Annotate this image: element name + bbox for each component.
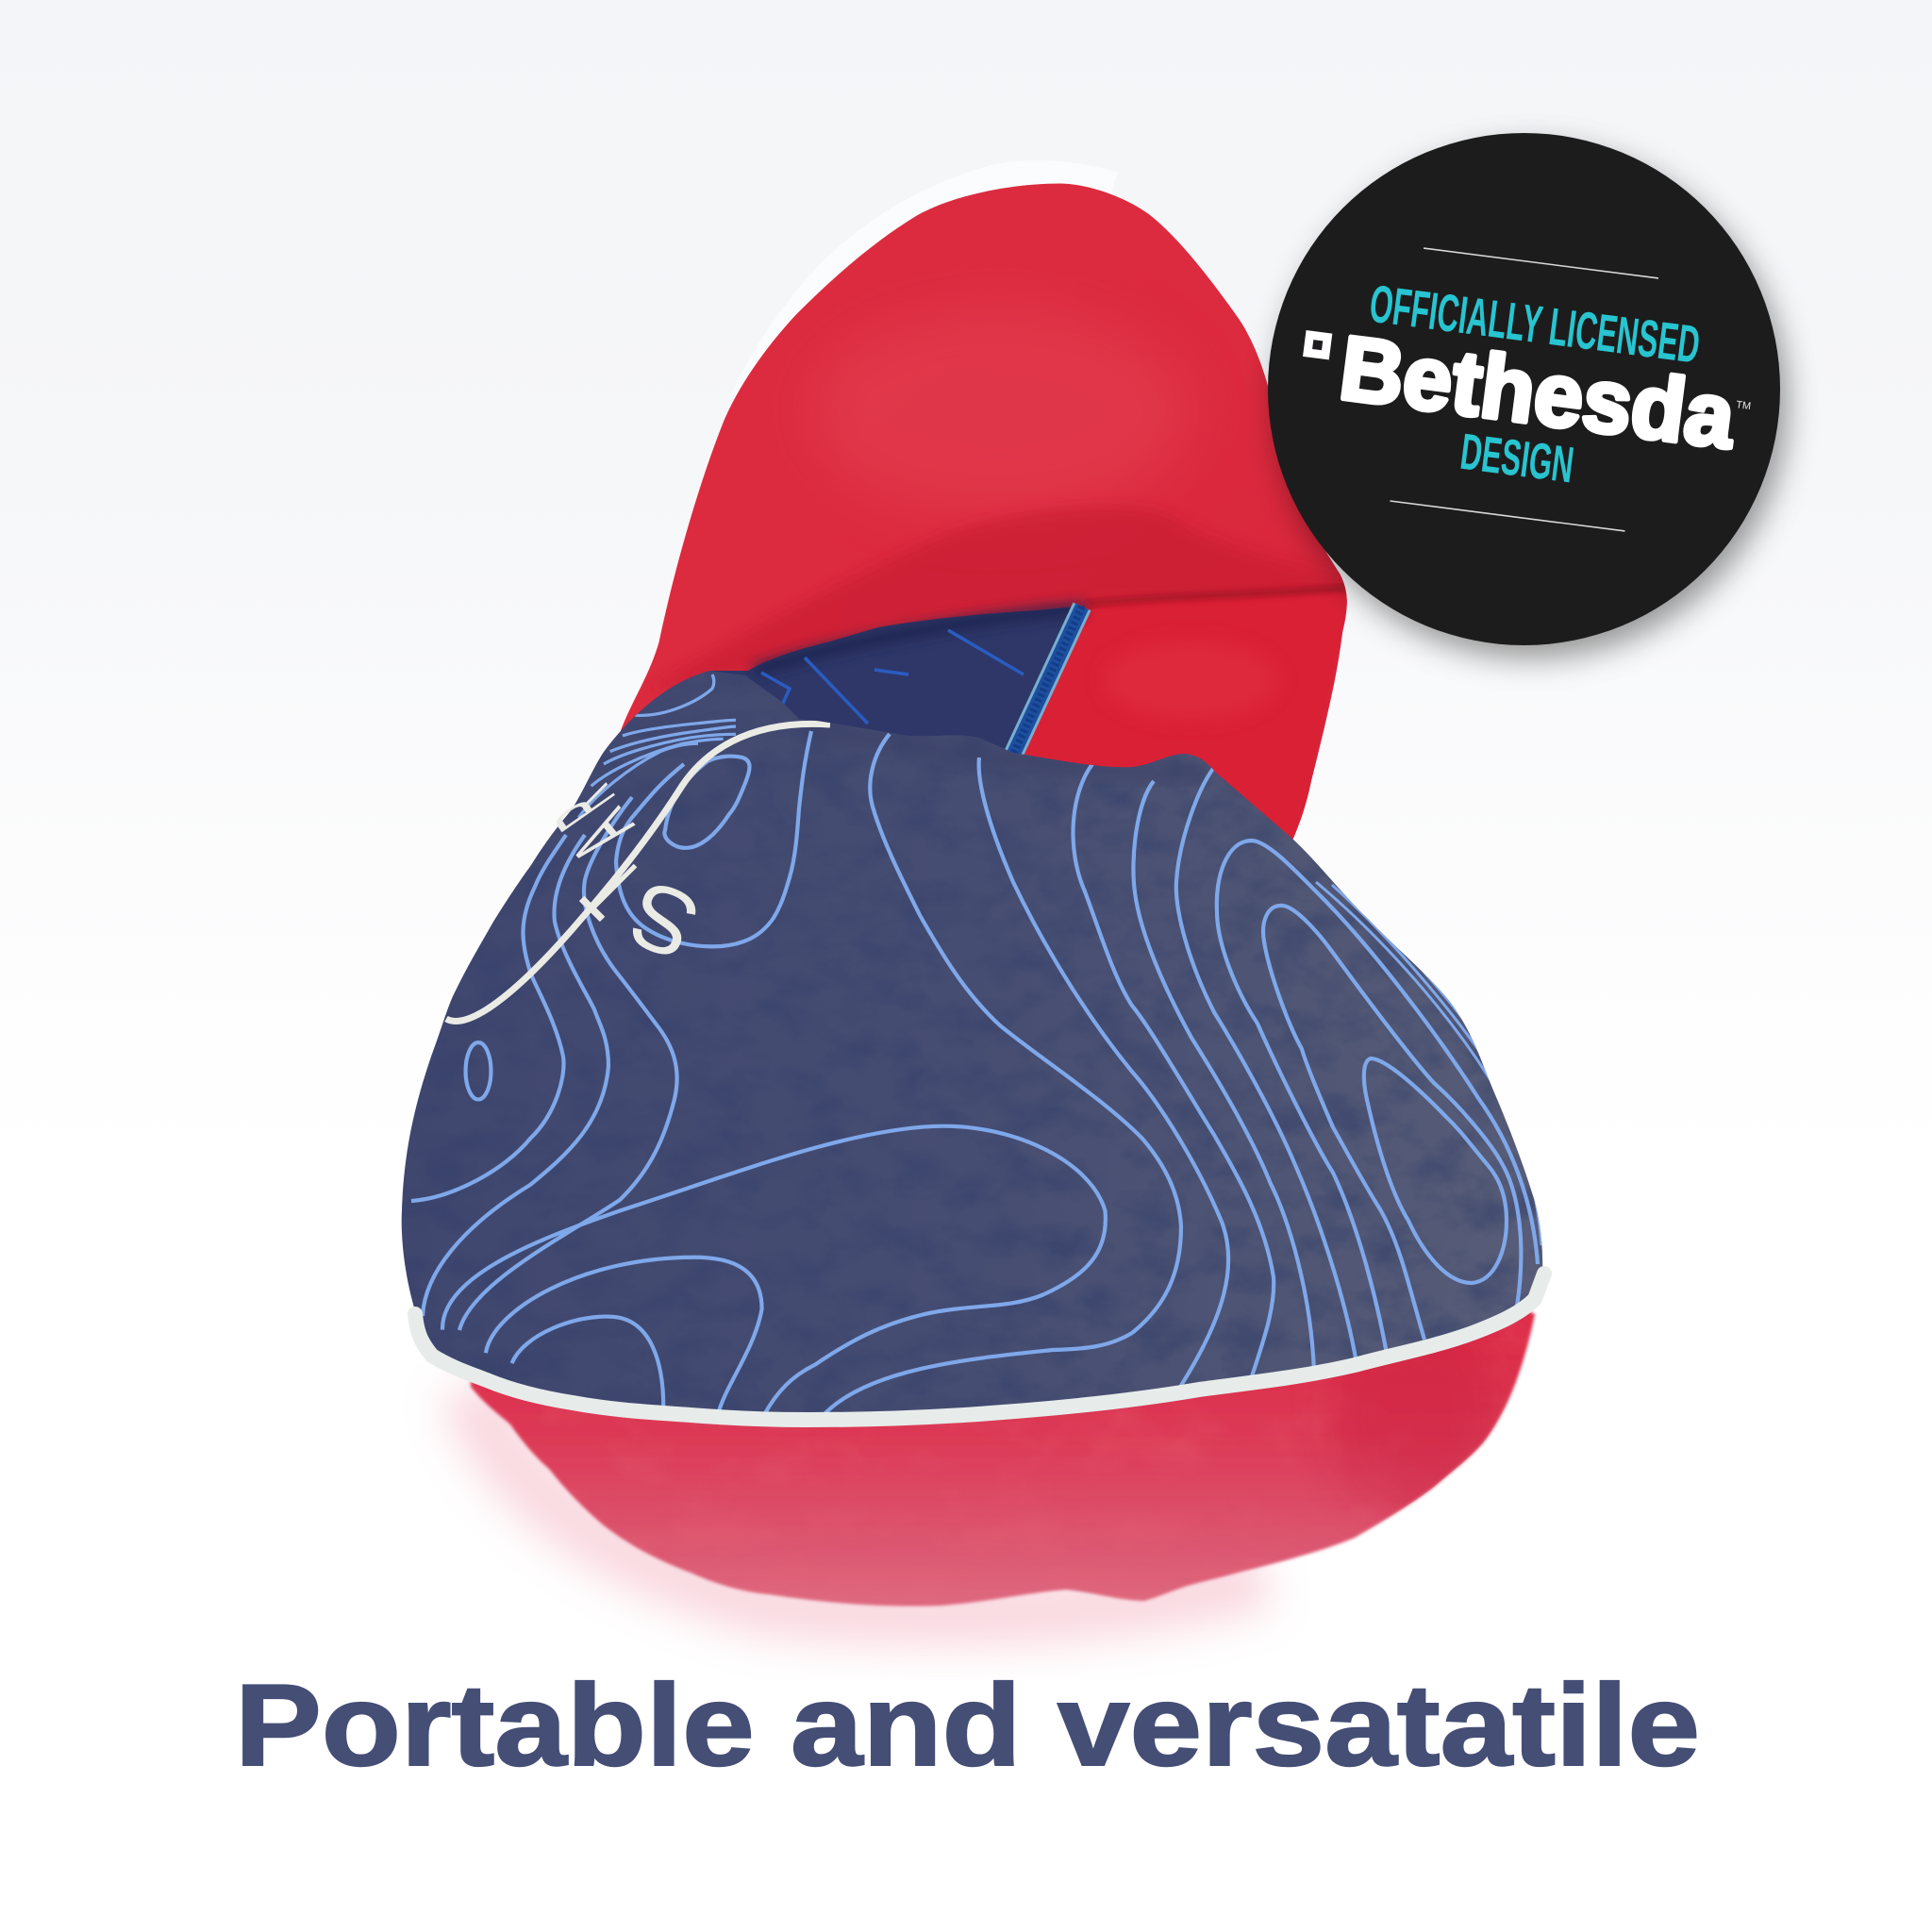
right inner loop [1263,906,1521,1340]
line L2 [824,734,1181,1415]
highlight on right panel [1124,658,1257,702]
red lobe base [621,183,1347,841]
title: Portable and versatatile [235,1661,1700,1790]
logo letters printed on pillow: R [536,770,633,845]
badge text: design: DESIGN [1457,424,1577,494]
upper red lobe of pillow [621,173,1350,843]
badge divider top [1424,248,1658,278]
badge divider bottom [1390,501,1624,531]
line L3 [979,758,1228,1394]
left line A3 [459,797,677,1330]
velour mottling on base [1118,1324,1515,1531]
dark shadow under flap [755,608,1085,672]
navy fabric body [402,671,1542,1420]
small loop [664,757,750,848]
logo letters printed on pillow [536,770,713,981]
badge: officially licensed Bethesda design [1268,133,1780,645]
line L5 [1133,781,1314,1373]
darker top shading [1006,749,1199,778]
inner navy lining of mouth [709,606,1085,759]
shaded flap under lobe [647,507,1345,690]
line L6 [1176,766,1357,1363]
white ring of logo [446,724,830,1021]
navy body with contour map print [396,660,1557,1424]
soft pink fabric halo around base [471,1387,1264,1613]
lower right red panel [1079,591,1347,840]
contour print clipped to body [396,660,1557,1424]
bottom lines and small oval [442,1042,1106,1415]
left line A1 [411,835,566,1201]
white piping behind lobe [741,173,1114,404]
logo letters printed on pillow: A [555,791,652,879]
logo letters printed on pillow: S [615,859,713,981]
right closed loop [1364,1058,1507,1283]
logo letters printed on pillow: T [564,840,661,937]
crease shadow [1085,588,1347,604]
interior contour lines [761,630,1024,724]
line L1 [616,731,811,946]
left line A2 [423,835,608,1316]
left fan of contour lines [578,675,736,818]
dark right side of base [1330,1311,1500,1519]
badge logo: square mark [1303,330,1332,359]
badge trademark: TM [1735,399,1752,412]
velour mottling on body [396,660,1557,1424]
right outer loop [1217,841,1538,1354]
right edge parallel lines [1316,882,1547,1245]
zipper [1013,607,1082,755]
lower red base of pillow [453,1292,1557,1613]
product: travel pillow [235,133,1780,1790]
white piping seam [415,1274,1544,1420]
lobe highlight [830,319,1172,502]
badge circle [1268,133,1780,645]
badge logo: Bethesda wordmark: Bethesda [1335,317,1740,468]
line L4 [1074,764,1274,1382]
white fragment of logo inside mouth [807,703,819,719]
